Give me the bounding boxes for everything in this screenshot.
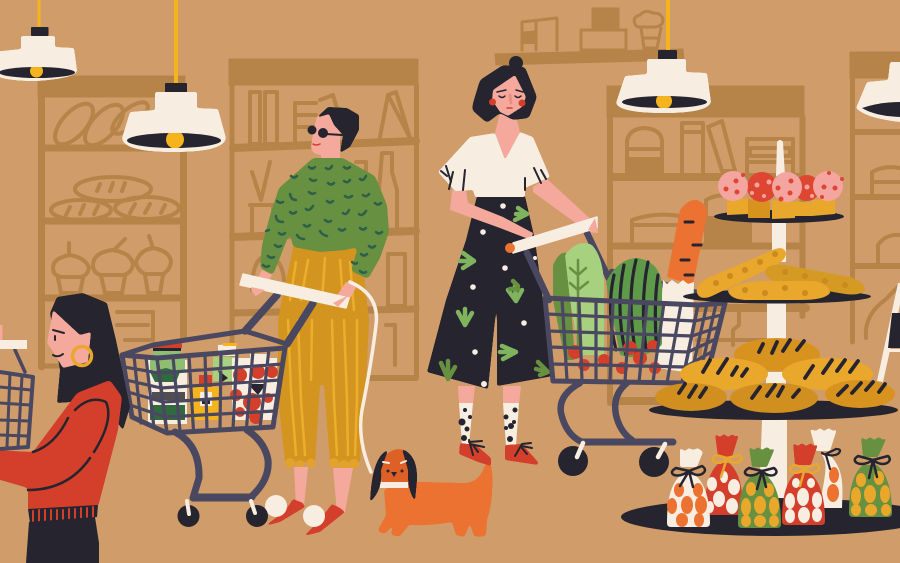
- left arm: [450, 190, 533, 240]
- handle bar of left cart: [240, 274, 349, 308]
- cream blouse: [438, 132, 550, 197]
- gift bag: red with white back left: [705, 434, 743, 515]
- bare lower legs: [458, 386, 521, 404]
- groceries: baguette, lettuce, watermelon and tomatoes in right cart: [553, 200, 707, 374]
- black trousers: [26, 517, 99, 563]
- fingers on handle: [251, 287, 349, 307]
- lamp: centre left: [122, 0, 226, 152]
- hands: [251, 270, 358, 307]
- cart: right cart handle bars: [527, 233, 725, 300]
- gold hoop earring: [72, 346, 92, 366]
- long black hair: [50, 293, 130, 430]
- lamp: far right: [856, 62, 900, 122]
- yellow trousers: [278, 244, 369, 470]
- face and neck: [311, 112, 345, 164]
- shelf: centre unit: [229, 59, 418, 378]
- bare ankles: [294, 467, 353, 512]
- watermelon: [606, 258, 662, 357]
- leash: [350, 282, 376, 472]
- gift bag: white with orange back right: [810, 428, 843, 508]
- facial features: [53, 330, 64, 356]
- cart: left cart contents: [148, 343, 278, 424]
- lamp: centre right: [616, 0, 711, 113]
- gift bag: red with white front: [782, 443, 825, 525]
- lamp: far left: [0, 0, 77, 81]
- display stand: lower tray with bread loaves: [649, 338, 898, 420]
- cart wheels right: [558, 443, 669, 477]
- green sweater: [260, 158, 389, 279]
- person: woman with cream blouse: [427, 56, 598, 466]
- cart wheels left: [178, 501, 268, 527]
- black culottes: [427, 196, 553, 389]
- cart: left shopping cart frame and basket: [122, 295, 313, 498]
- shelf: top wall ledge with items: [495, 8, 684, 65]
- baguette: [657, 200, 707, 373]
- shelf: left bakery unit: [38, 76, 185, 367]
- person: woman in red sweater: [0, 293, 130, 563]
- handle bar of right cart: [505, 217, 598, 253]
- sign board at right edge: [877, 283, 900, 382]
- gift bag: orange and white front left: [667, 448, 710, 527]
- chest and neck: [495, 113, 520, 160]
- tomatoes: [568, 340, 661, 374]
- shelf: far right unit: [850, 52, 900, 342]
- display stand: top tray with muffins: [714, 171, 844, 223]
- handheld basket: [0, 350, 33, 449]
- gift bag: green and yellow front middle: [738, 447, 781, 528]
- red sweater: [0, 380, 122, 523]
- right arm: [533, 178, 598, 233]
- culotte leaf and dot pattern: [441, 203, 548, 387]
- hair and sunglasses: [308, 107, 359, 153]
- face: [489, 75, 526, 116]
- display stand: central pole: [759, 140, 787, 500]
- dog: [370, 449, 493, 537]
- cart: right shopping cart basket and frame: [545, 298, 725, 442]
- gift bag: green and yellow right: [849, 437, 892, 517]
- shelf: right unit: [607, 86, 806, 403]
- polka dot socks: [458, 403, 519, 446]
- face: [47, 310, 91, 368]
- red shoes with black laces: [459, 440, 538, 466]
- person: woman in green sweater: [251, 107, 389, 536]
- slippers with pom poms: [265, 495, 345, 536]
- display stand: middle tray with long baguettes: [683, 248, 871, 304]
- hair and bun: [472, 56, 537, 123]
- display stand: bottom tray: [621, 498, 900, 536]
- lettuce: [553, 243, 604, 360]
